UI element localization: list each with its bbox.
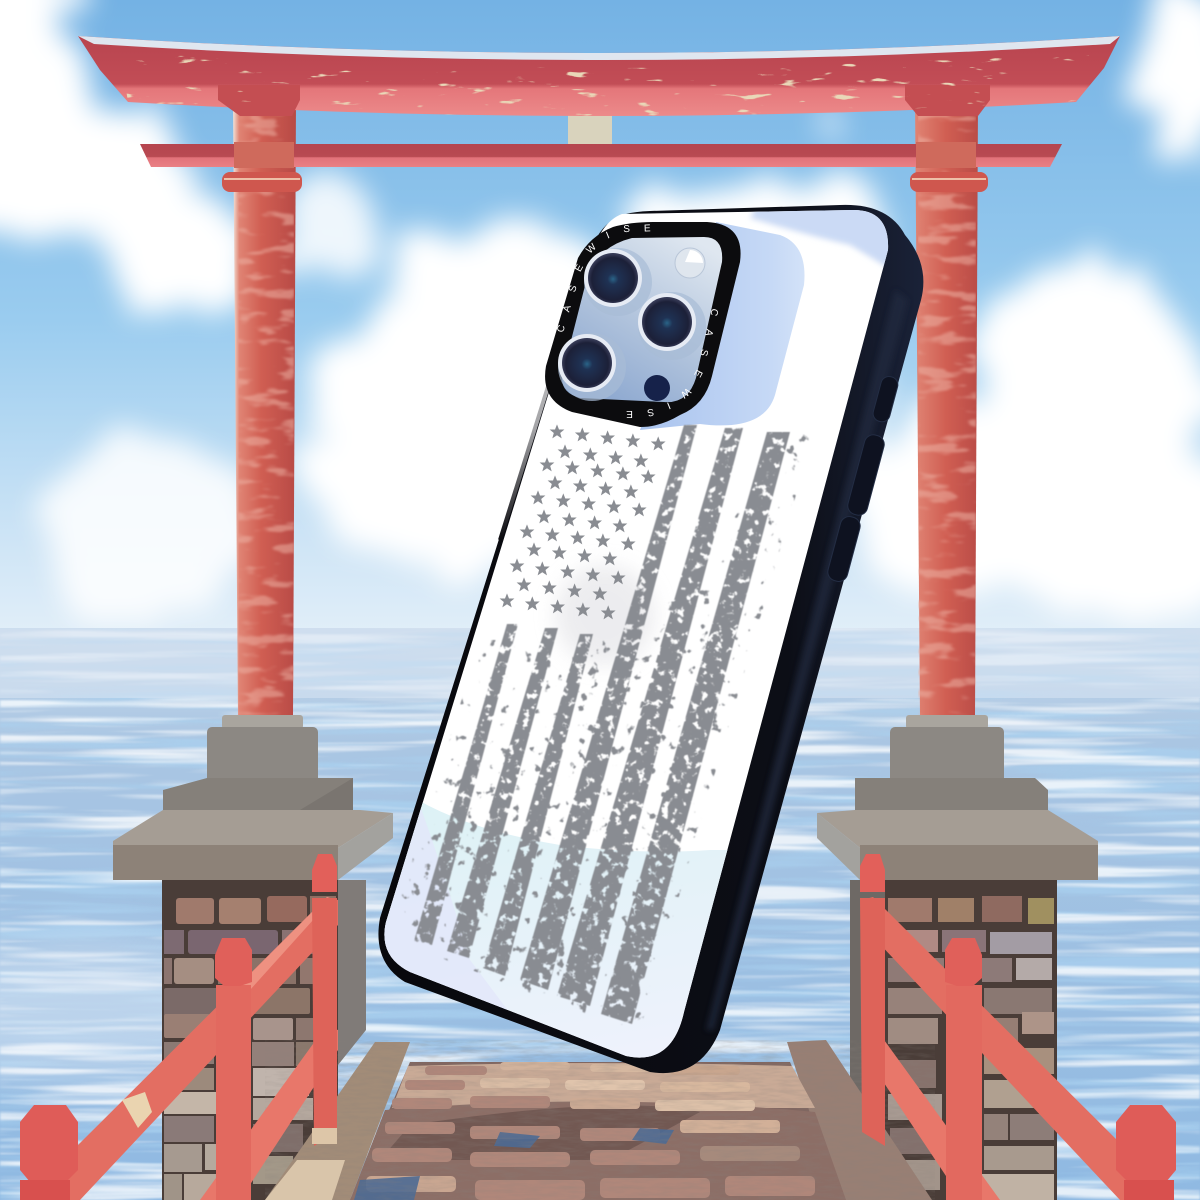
right pillar: [910, 100, 988, 716]
flash: [675, 248, 705, 278]
middle post: [216, 985, 251, 1200]
sky background: [0, 0, 1200, 640]
middle post: [946, 985, 982, 1200]
case frame: [378, 205, 923, 1073]
flag speckles: [400, 432, 812, 1030]
upper rail: [30, 897, 338, 1200]
lavender reflection: [749, 210, 888, 268]
case back: [370, 200, 900, 1080]
lens right: [638, 292, 706, 360]
logo ghost: [555, 565, 655, 665]
top roof beam: [78, 36, 1120, 116]
right kerb: [787, 1040, 932, 1200]
lower crossbeam: [140, 142, 1062, 168]
clouds: [0, 0, 1200, 620]
right brick pier: [850, 880, 1057, 1200]
phone case: [378, 204, 924, 1074]
rear post: [312, 898, 337, 1146]
torii gate: [78, 36, 1120, 716]
lens bottom: [558, 333, 626, 401]
rear post: [860, 898, 885, 1146]
brand text: CASEWISE: [557, 224, 650, 332]
right stone base: [817, 715, 1098, 880]
flag stars: [500, 424, 666, 619]
sensor: [644, 375, 670, 401]
camera module: [545, 222, 741, 427]
left edge highlight: [500, 262, 587, 540]
lower rail: [200, 1026, 338, 1200]
flag graphic: [400, 424, 812, 1030]
left pillar: [222, 100, 302, 716]
paved walkway: [265, 1040, 935, 1200]
flag stripes: [414, 425, 790, 1024]
left kerb: [265, 1042, 410, 1200]
right railing: [860, 854, 1176, 1200]
side buttons: [826, 375, 900, 583]
front post: [20, 1105, 78, 1182]
front post: [1116, 1105, 1176, 1182]
camera plate: [562, 237, 722, 402]
centre strut: [568, 104, 612, 144]
lower rail: [862, 1026, 1000, 1200]
camera shadow reflection: [640, 222, 804, 430]
lens top: [584, 248, 652, 316]
left railing: [20, 854, 338, 1200]
brand text repeat: CASEWISE: [626, 309, 718, 418]
left stone base: [113, 715, 393, 880]
water: [0, 628, 1200, 1200]
frame reflection: [706, 290, 908, 1030]
left brick pier: [162, 880, 366, 1200]
upper rail: [862, 897, 1170, 1200]
lower reflection: [384, 802, 728, 1058]
